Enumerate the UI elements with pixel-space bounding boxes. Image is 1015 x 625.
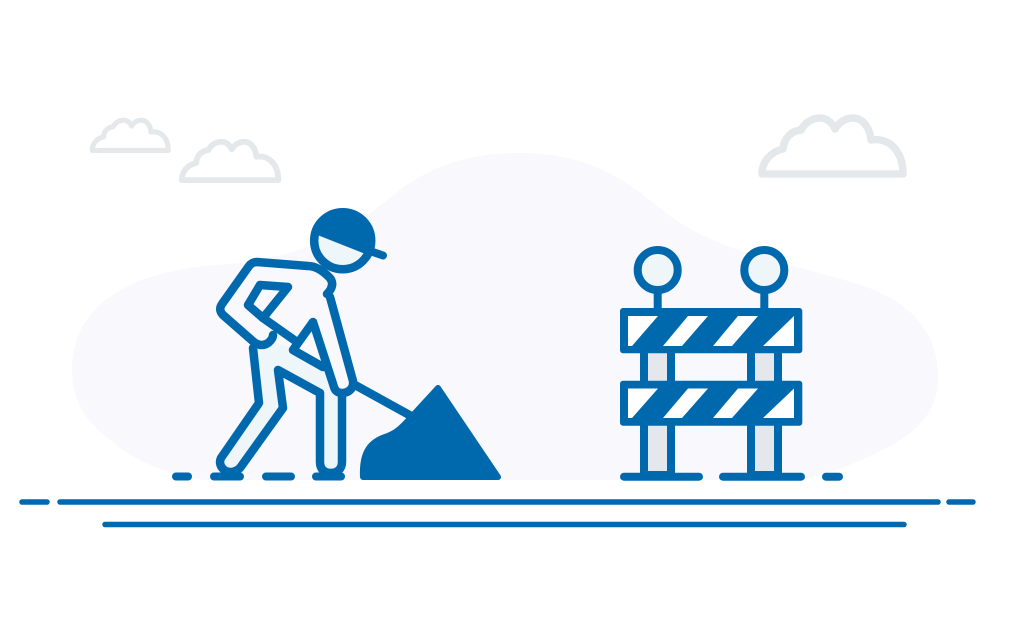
lamp stems (658, 290, 764, 312)
left post (644, 345, 671, 475)
cloud: small left (92, 120, 168, 150)
ground dashes under worker (176, 472, 341, 480)
right post (751, 345, 778, 475)
hard hat (315, 215, 383, 256)
left lamp (638, 250, 678, 290)
lower striped board (620, 381, 802, 426)
barricade feet and dash (624, 473, 839, 481)
worker inner arm gap (248, 285, 288, 318)
worker leg fill (220, 340, 342, 473)
worker (220, 212, 413, 473)
barricade (620, 250, 839, 477)
dirt pile (363, 388, 498, 477)
road line: lower (105, 522, 904, 527)
worker leg outline (220, 348, 342, 473)
background blob (72, 153, 938, 480)
right lamp (744, 250, 784, 290)
cloud: small middle (182, 142, 278, 180)
upper striped board (620, 308, 802, 353)
road line: upper (22, 499, 973, 505)
worker torso and arm (220, 262, 353, 393)
cloud: large right (762, 118, 903, 174)
head (314, 212, 371, 269)
shovel handle (263, 318, 413, 417)
